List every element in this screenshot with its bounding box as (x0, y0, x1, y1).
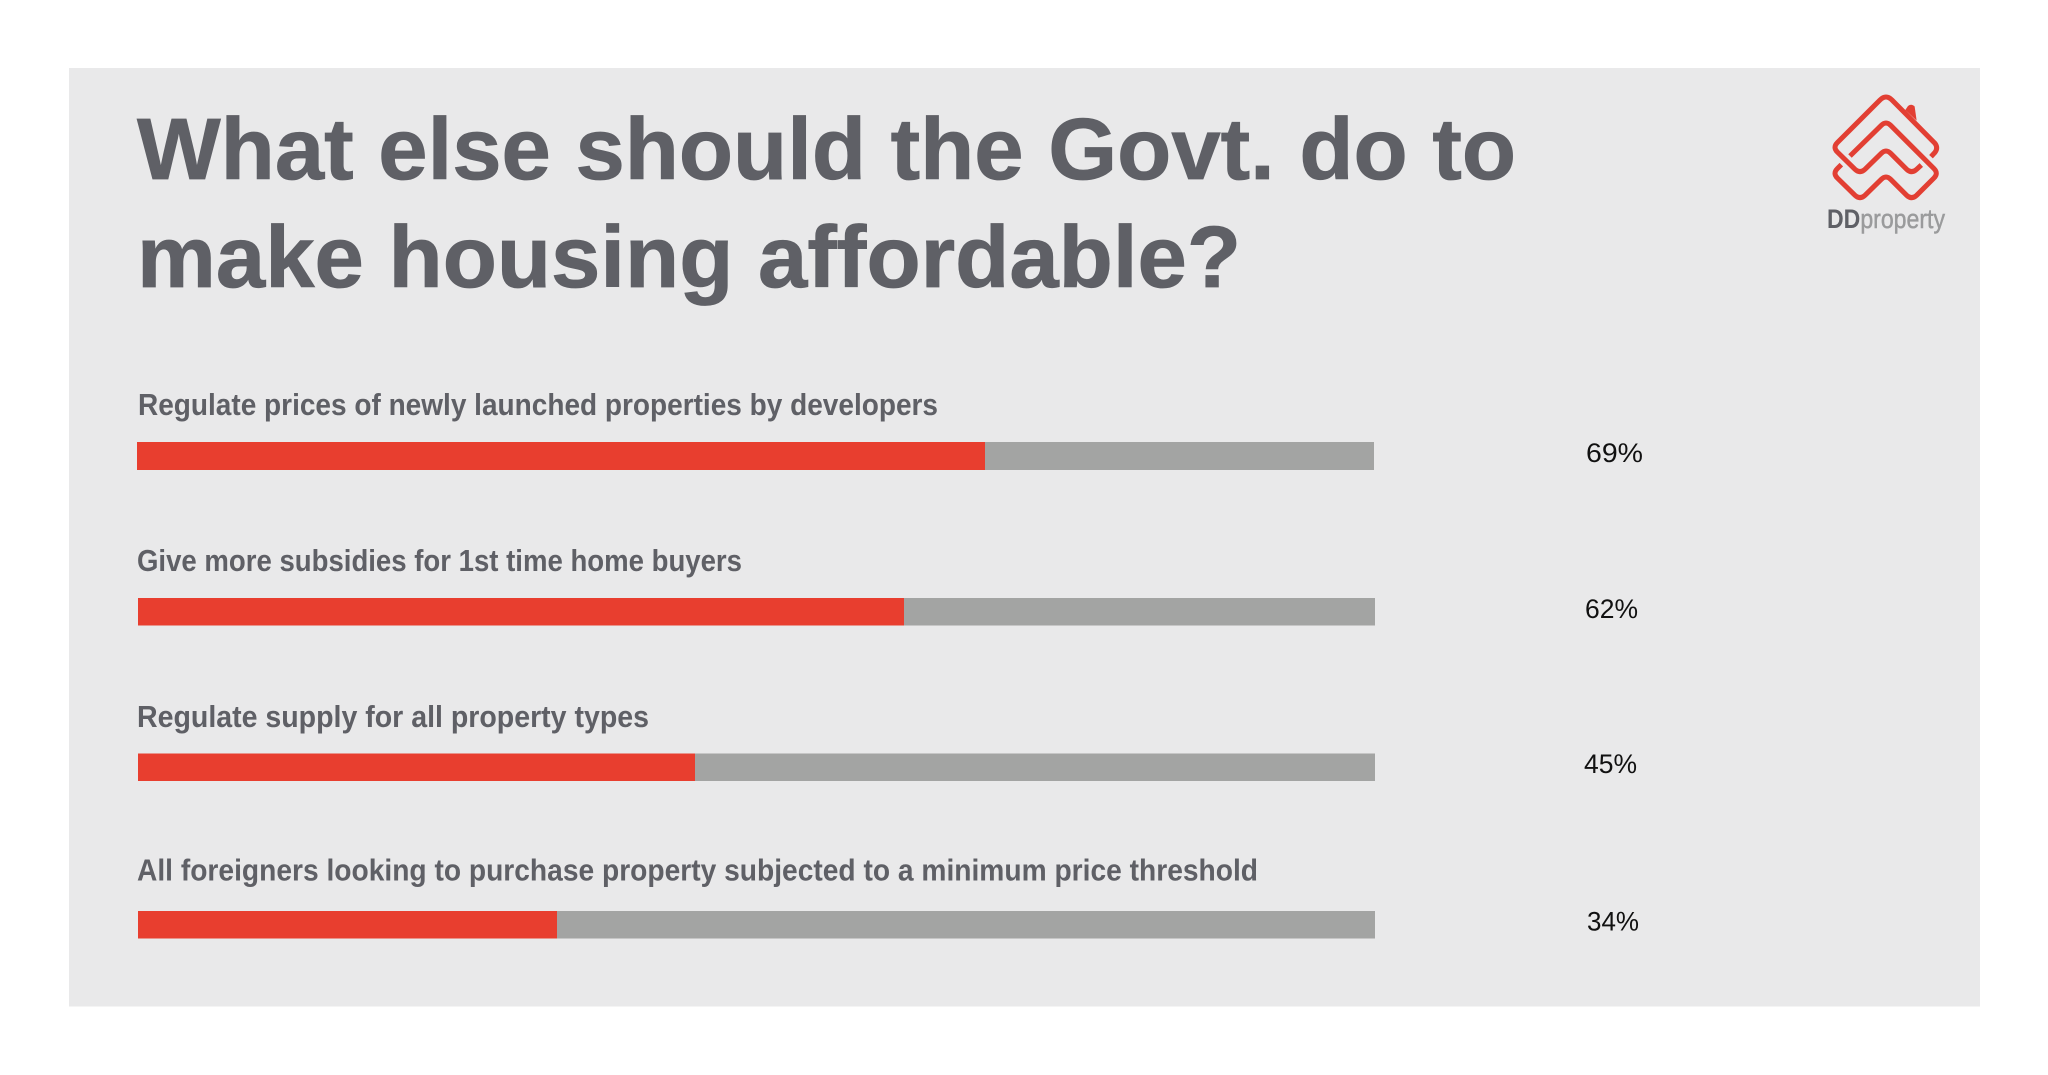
label: row 2: Give more subsidies for 1st time home buyers (137, 543, 742, 578)
label: row 1: Regulate prices of newly launched properties by developers (138, 387, 938, 422)
bar: row 1, 69% (137, 442, 1374, 470)
icon: DDproperty logo (1827, 97, 1945, 234)
label: row 4: All foreigners looking to purchase property subjected to a minimum price threshold (137, 852, 1258, 888)
bar: row 2, 62% (138, 598, 1375, 626)
title: What else should the Govt. do to (137, 101, 1516, 198)
value: row 1: 69% (1586, 438, 1643, 468)
bar: row 3, 45% (138, 754, 1375, 781)
title (137, 101, 1516, 306)
value: row 2: 62% (1585, 594, 1638, 624)
value: row 3: 45% (1584, 749, 1637, 779)
value: row 4: 34% (1587, 906, 1639, 936)
title: make housing affordable? (137, 209, 1241, 306)
label: row 3: Regulate supply for all property types (137, 699, 649, 734)
logo wordmark: DDproperty (1827, 204, 1945, 234)
bar: row 4, 34% (138, 911, 1375, 938)
